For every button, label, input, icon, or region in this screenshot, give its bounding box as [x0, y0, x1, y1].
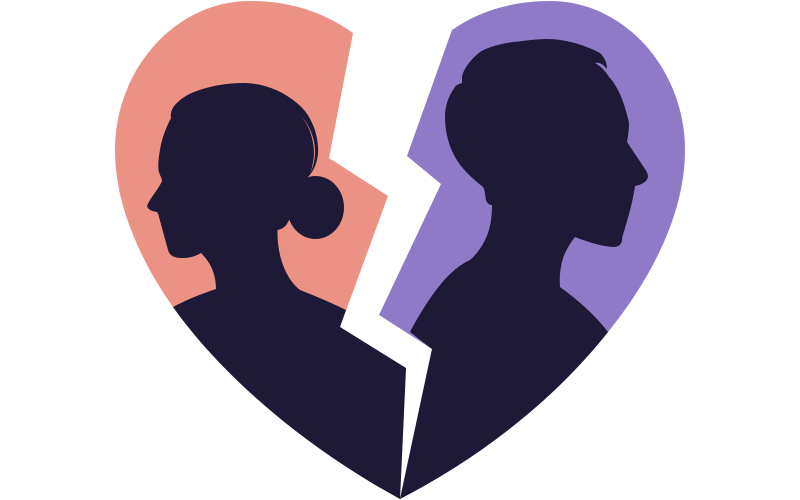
woman hair strand highlight: [301, 116, 315, 176]
right half of heart: purple: [379, 1, 685, 499]
woman hair bun: [287, 176, 344, 239]
man silhouette: [400, 39, 648, 499]
woman silhouette: [147, 83, 406, 499]
woman head and shoulders: [147, 83, 406, 499]
left half of heart: salmon: [115, 1, 406, 499]
